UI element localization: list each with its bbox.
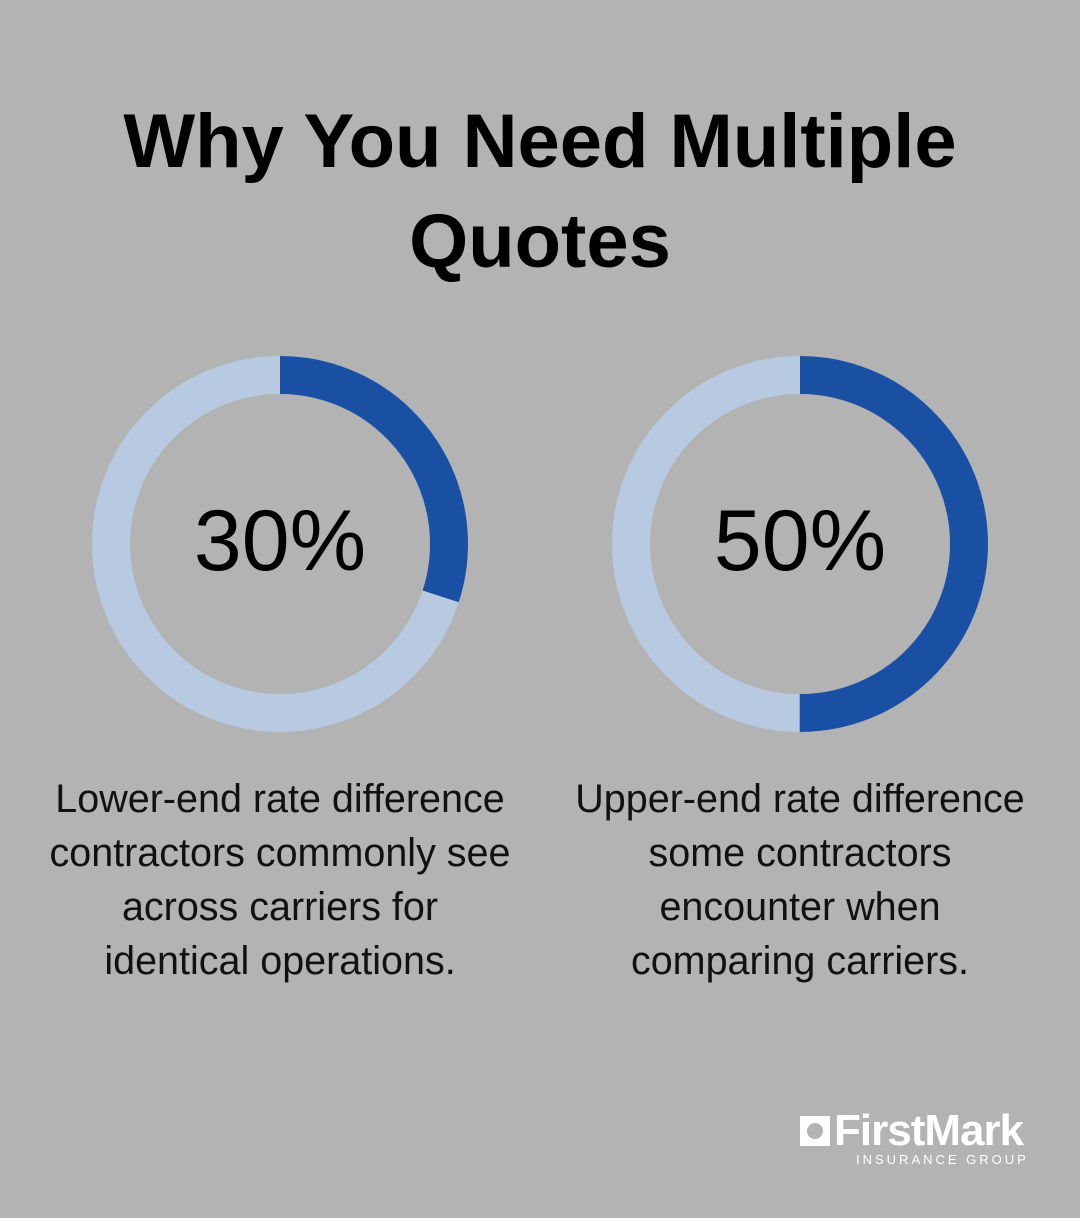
text: right description: encounter when xyxy=(659,885,941,929)
logo xyxy=(800,1106,1029,1167)
text: left description xyxy=(49,777,510,983)
donut: 50%: 50% xyxy=(714,493,886,589)
donut: 50% xyxy=(631,375,969,713)
logo: FirstMark xyxy=(834,1106,1023,1155)
text: left description: Lower-end rate difference xyxy=(55,777,505,821)
donut: 30% xyxy=(111,375,449,713)
title xyxy=(123,99,957,284)
text: right description: Upper-end rate difference xyxy=(575,777,1025,821)
text: left description: across carriers for xyxy=(122,885,438,929)
title: Why You Need Multiple xyxy=(123,99,957,184)
text: left description: identical operations. xyxy=(104,939,456,983)
donut charts xyxy=(92,356,988,732)
logo: INSURANCE GROUP xyxy=(856,1152,1029,1167)
donut: 30%: 30% xyxy=(194,493,366,589)
text: right description xyxy=(575,777,1025,983)
text: left description: contractors commonly see xyxy=(49,831,510,875)
text: right description: some contractors xyxy=(649,831,951,875)
title: Quotes xyxy=(409,199,671,284)
text: right description: comparing carriers. xyxy=(631,939,969,983)
